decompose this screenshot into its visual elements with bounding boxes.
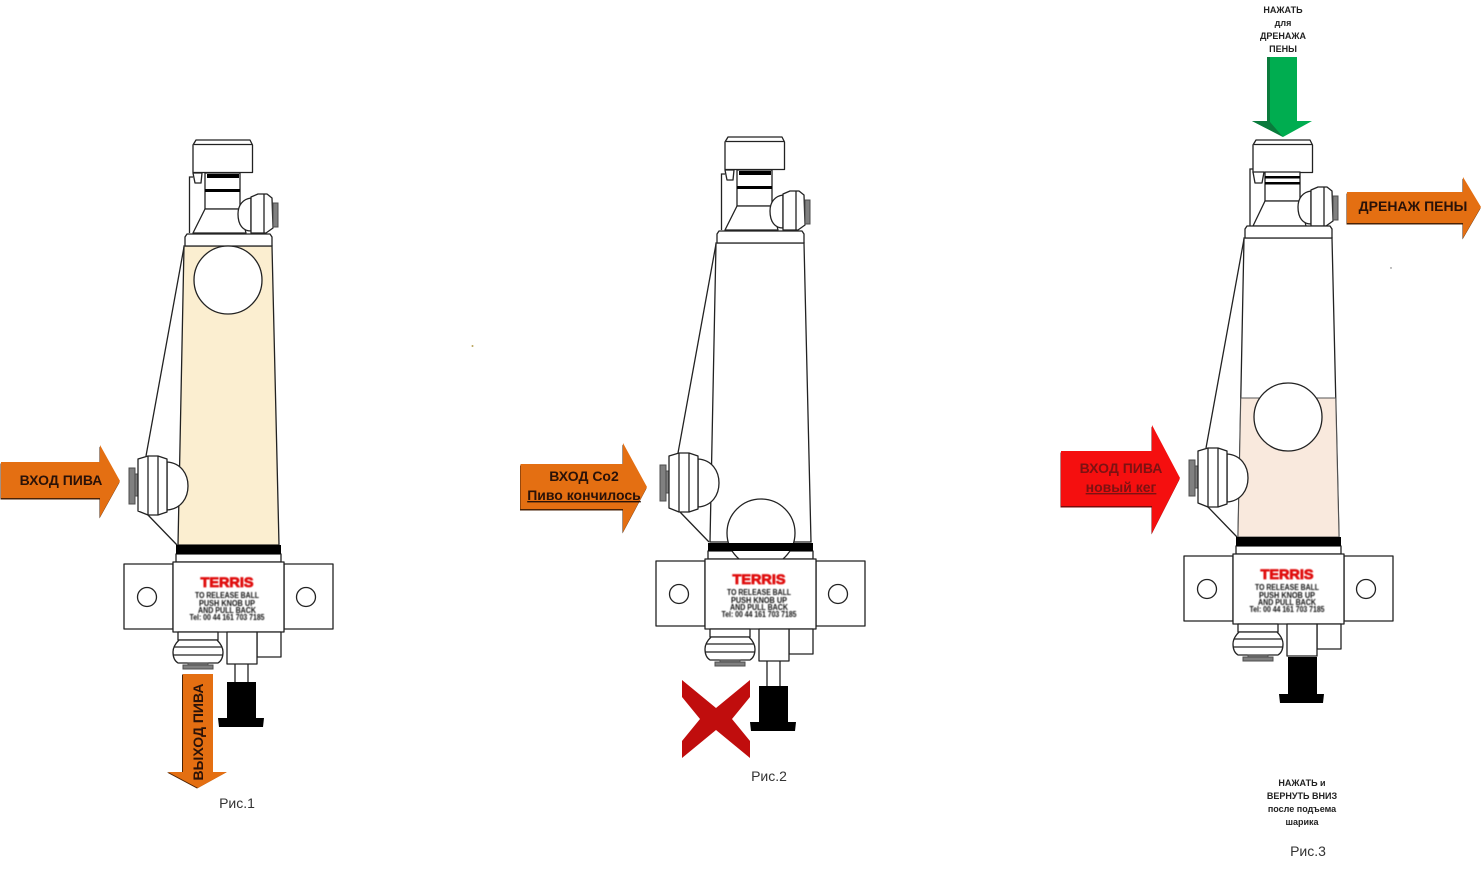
figure 2: beer ran out xyxy=(520,137,865,784)
caption: Рис.3 xyxy=(1290,843,1326,859)
block label: AND PULL BACK xyxy=(198,606,256,615)
note: press to drain xyxy=(1260,5,1307,54)
seal band xyxy=(708,543,813,551)
valve head xyxy=(722,137,810,230)
left inlet fitting xyxy=(660,453,719,512)
figure 3: foam drain xyxy=(1060,5,1481,859)
caption: Рис.2 xyxy=(751,768,787,784)
note: press and return xyxy=(1267,778,1337,827)
mounting block xyxy=(1184,554,1393,624)
ball at bottom xyxy=(727,499,795,567)
block label: AND PULL BACK xyxy=(1258,598,1316,607)
arrow: foam drain: ДРЕНАЖ ПЕНЫ xyxy=(1359,198,1467,214)
note: press and return: после подъема xyxy=(1268,804,1337,814)
ball rising xyxy=(1254,383,1322,451)
bottom fittings xyxy=(705,629,813,666)
arrow: press knob xyxy=(1252,57,1312,137)
note: press and return: ВЕРНУТЬ ВНИЗ xyxy=(1267,791,1337,801)
block label: TERRIS xyxy=(732,571,786,587)
block label: Tel: 00 44 161 703 7185 xyxy=(190,613,265,622)
arrow: beer inlet new keg xyxy=(1060,425,1180,534)
mounting block xyxy=(124,562,333,632)
block label: TERRIS xyxy=(1260,566,1314,582)
speck near drain arrow xyxy=(1390,267,1392,269)
arrow: beer inlet new keg: ВХОД ПИВА xyxy=(1080,460,1162,476)
note: press to drain: НАЖАТЬ xyxy=(1263,5,1303,15)
valve head xyxy=(1250,140,1338,227)
arrow: beer outlet xyxy=(167,674,227,788)
note: press and return: шарика xyxy=(1285,817,1320,827)
arrow: beer inlet new keg: новый кег xyxy=(1086,479,1157,495)
block label: AND PULL BACK xyxy=(730,603,788,612)
block label: PUSH KNOB UP xyxy=(731,596,788,605)
arrow: CO2 inlet xyxy=(520,443,647,534)
release plunger xyxy=(750,661,796,731)
empty chamber xyxy=(678,231,813,559)
valve head xyxy=(190,140,278,233)
arrow: foam drain xyxy=(1346,177,1481,240)
speck near centre xyxy=(472,345,474,347)
caption: Рис.1 xyxy=(219,795,255,811)
bottom fittings xyxy=(173,632,281,669)
note: press to drain: ПЕНЫ xyxy=(1269,44,1297,54)
block label: TERRIS xyxy=(200,574,254,590)
chamber with beer xyxy=(146,234,279,545)
block label: TO RELEASE BALL xyxy=(727,588,791,597)
block label xyxy=(722,571,797,619)
mounting block xyxy=(656,559,865,629)
seal band xyxy=(176,545,281,562)
block label xyxy=(1250,566,1325,614)
arrow: beer outlet: ВЫХОД ПИВА xyxy=(190,683,206,781)
seal band xyxy=(1236,537,1341,554)
block label: TO RELEASE BALL xyxy=(195,591,259,600)
block label: PUSH KNOB UP xyxy=(1259,591,1316,600)
arrow: CO2 inlet: ВХОД Co2 xyxy=(549,468,619,484)
arrow: CO2 inlet: Пиво кончилось xyxy=(527,487,641,503)
arrow: beer inlet: ВХОД ПИВА xyxy=(20,472,102,488)
ball floating at top xyxy=(194,246,262,314)
note: press to drain: ДРЕНАЖА xyxy=(1260,31,1307,41)
block label: PUSH KNOB UP xyxy=(199,599,256,608)
chamber with foam level xyxy=(1206,226,1339,537)
block label: Tel: 00 44 161 703 7185 xyxy=(722,610,797,619)
bottom fittings xyxy=(1233,624,1341,661)
note: press to drain: для xyxy=(1275,18,1291,28)
left inlet fitting xyxy=(129,456,188,515)
note: press and return: НАЖАТЬ и xyxy=(1278,778,1326,788)
release plunger raised xyxy=(1279,657,1324,703)
icon: red cross xyxy=(682,680,750,758)
block label: Tel: 00 44 161 703 7185 xyxy=(1250,605,1325,614)
arrow: beer inlet xyxy=(0,445,120,518)
figure 1: beer flowing xyxy=(0,140,333,811)
release plunger xyxy=(218,664,264,727)
left inlet fitting xyxy=(1189,448,1248,507)
block label: TO RELEASE BALL xyxy=(1255,583,1319,592)
block label xyxy=(190,574,265,622)
